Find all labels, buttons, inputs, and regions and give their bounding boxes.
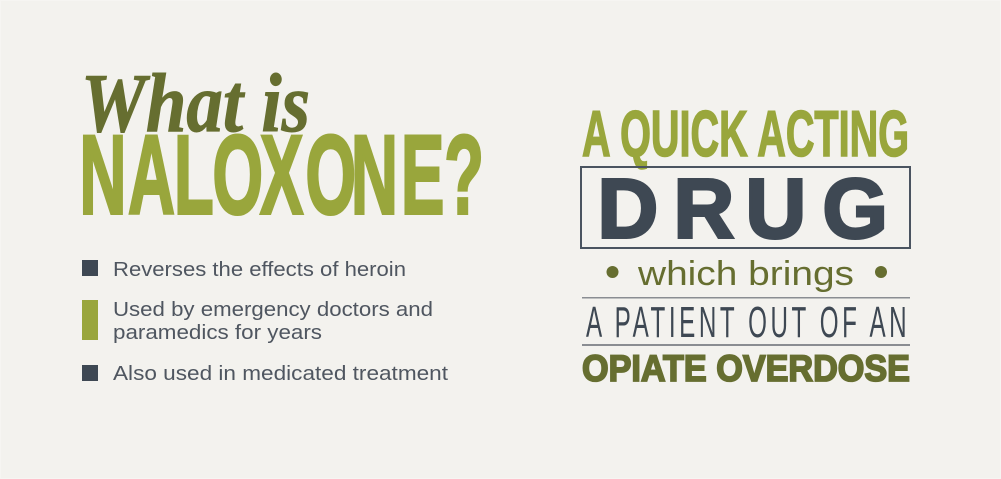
boxed word: DRUG: DRUG: [598, 162, 888, 256]
title: What is: What is: [81, 57, 310, 150]
bullet 2 text: paramedics for years: [113, 322, 322, 344]
title: NALOXONE?: NALOXONE?: [79, 113, 484, 238]
statement: A patient out of an: A PATIENT OUT OF AN: [586, 297, 907, 347]
divider top: [582, 297, 910, 298]
bullet 1 marker: [82, 260, 98, 276]
statement: which brings: [606, 255, 887, 293]
bullet 3 text: Also used in medicated treatment: [113, 363, 448, 385]
bullet 2 marker: [82, 300, 98, 340]
bullet list: [82, 259, 448, 385]
divider bottom: [582, 344, 910, 346]
bullet 3 marker: [82, 365, 98, 381]
bullet 2 text: Used by emergency doctors and: [113, 299, 433, 321]
statement: Opiate overdose: OPIATE OVERDOSE: [582, 348, 910, 389]
statement: which brings: which brings: [637, 255, 854, 293]
bullet 1 text: Reverses the effects of heroin: [113, 259, 406, 281]
bullet 2 text: [113, 299, 433, 344]
